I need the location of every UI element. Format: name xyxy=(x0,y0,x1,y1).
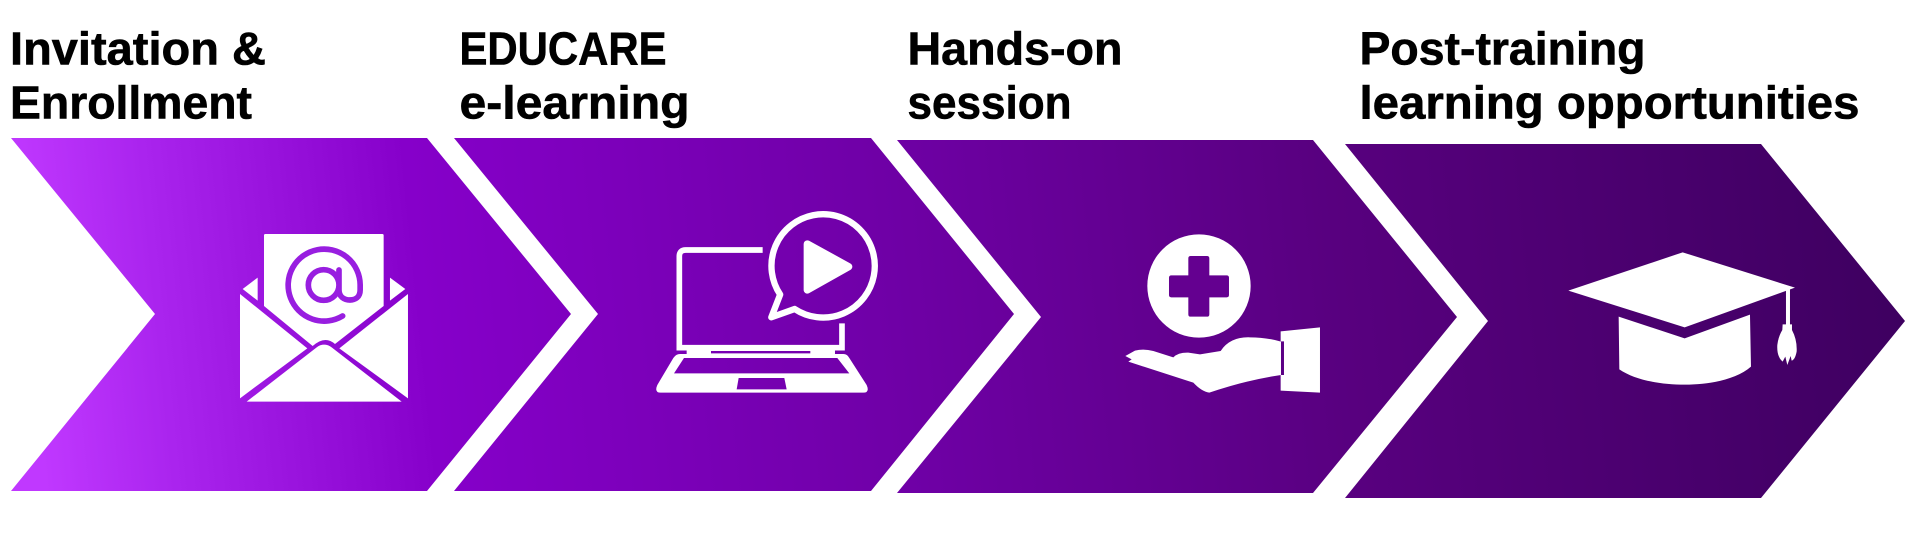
panel: post-training learning opportunities xyxy=(1345,22,1905,498)
heading: Post-training learning opportunities xyxy=(1360,22,1860,128)
chevron 3 xyxy=(897,140,1457,493)
chevron 4 xyxy=(1345,144,1905,498)
icon: hand holding medical cross xyxy=(1125,234,1320,393)
chevron 1 xyxy=(11,138,571,491)
heading: EDUCARE e-learning xyxy=(460,22,690,128)
icon: graduation cap xyxy=(1568,252,1797,385)
panel: EDUCARE e-learning xyxy=(454,22,1014,491)
panel: invitation and enrollment xyxy=(10,22,571,491)
heading: Hands-on session: session xyxy=(908,76,1072,128)
icon: envelope with at sign xyxy=(240,234,408,402)
heading: Invitation & Enrollment: Enrollment xyxy=(10,76,252,128)
chevron 2 xyxy=(454,138,1014,491)
heading: Invitation & Enrollment: Invitation & xyxy=(10,22,266,74)
heading: Post-training learning opportunities: Post-training xyxy=(1360,22,1646,74)
heading: Hands-on session xyxy=(908,22,1122,128)
panel: hands-on session xyxy=(897,22,1457,493)
heading: Invitation & Enrollment xyxy=(10,22,266,128)
icon: laptop with play bubble xyxy=(656,214,875,393)
heading: Post-training learning opportunities: learning opportunities xyxy=(1360,76,1860,128)
heading: EDUCARE e-learning: EDUCARE xyxy=(460,22,666,74)
heading: EDUCARE e-learning: e-learning xyxy=(460,76,690,128)
heading: Hands-on session: Hands-on xyxy=(908,22,1122,74)
